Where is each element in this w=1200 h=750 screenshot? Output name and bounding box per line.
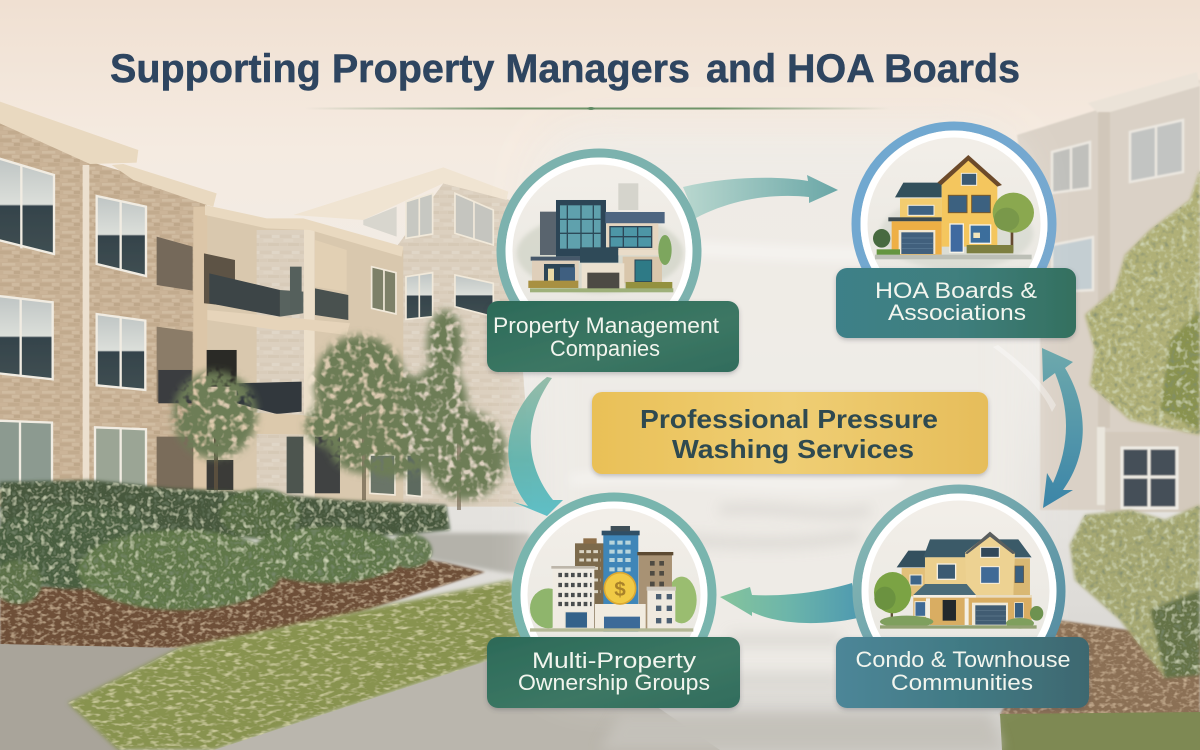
label text bbox=[518, 648, 710, 695]
left bushes bbox=[0, 480, 450, 610]
right wing windows bbox=[370, 193, 493, 497]
front walkway bbox=[214, 640, 720, 750]
label text bbox=[493, 313, 719, 361]
title: and HOA Boards bbox=[706, 47, 1020, 91]
label text: Property Management bbox=[493, 313, 719, 338]
icon: city buildings with coin bbox=[530, 526, 697, 632]
upper path bbox=[418, 533, 530, 574]
building walls bbox=[0, 123, 533, 507]
label text bbox=[856, 647, 1070, 695]
label pill bbox=[487, 301, 739, 372]
centre banner: Professional Pressure Washing Services: Professional Pressure bbox=[640, 404, 938, 434]
label text: Ownership Groups bbox=[518, 670, 710, 695]
right bushes bbox=[1070, 505, 1200, 678]
roof cornices bbox=[0, 102, 508, 257]
icon: yellow house bbox=[873, 155, 1034, 270]
right tree bbox=[1085, 170, 1200, 435]
window columns bbox=[0, 158, 146, 490]
title divider bbox=[305, 107, 890, 110]
node: Property Management Companies bbox=[487, 153, 739, 372]
label pill bbox=[836, 637, 1089, 708]
node: HOA Boards & Associations bbox=[836, 126, 1076, 338]
title bbox=[110, 47, 1020, 91]
label pill bbox=[487, 637, 740, 708]
lower centre pavement bbox=[600, 714, 1002, 750]
arrow: condo to multi-property bbox=[720, 583, 858, 623]
centre banner: Professional Pressure Washing Services: Washing Services bbox=[672, 434, 914, 464]
centre streaks bbox=[560, 248, 1000, 680]
icon: modern building bbox=[517, 183, 683, 293]
label text: Communities bbox=[891, 670, 1033, 695]
arrow: management to HOA bbox=[683, 175, 838, 218]
label text: Companies bbox=[550, 336, 660, 361]
right mulch and lawn bbox=[1000, 620, 1200, 750]
ring bbox=[501, 153, 697, 349]
ring bbox=[516, 497, 712, 693]
left apartment building photo bbox=[0, 102, 533, 507]
arrow: management loop to multi-property bbox=[508, 377, 563, 516]
label text: HOA Boards & bbox=[875, 278, 1037, 303]
label text: Associations bbox=[888, 300, 1026, 325]
arrow: HOA to condo bbox=[993, 345, 1083, 508]
label text bbox=[875, 278, 1037, 325]
node: Multi-Property Ownership Groups bbox=[487, 497, 740, 708]
label text: Multi-Property bbox=[532, 648, 696, 673]
ring bbox=[857, 489, 1061, 693]
icon: city buildings with coin: $ bbox=[614, 578, 626, 601]
label text: Condo & Townhouse bbox=[856, 647, 1070, 672]
lawn strip bbox=[68, 580, 530, 750]
label pill bbox=[836, 268, 1076, 338]
centre banner: Professional Pressure Washing Services bbox=[592, 392, 988, 474]
recessed balconies bbox=[157, 237, 350, 493]
node: Condo & Townhouse Communities bbox=[836, 489, 1089, 708]
centre soft wash bbox=[535, 130, 1025, 690]
title: Supporting Property Managers bbox=[110, 47, 690, 91]
left trees bbox=[173, 310, 507, 510]
ring bbox=[856, 126, 1052, 322]
mulch bed bbox=[0, 555, 485, 652]
left sidewalk bbox=[0, 644, 179, 750]
right apartment building photo bbox=[1017, 72, 1200, 512]
icon: townhouse bbox=[874, 532, 1043, 629]
